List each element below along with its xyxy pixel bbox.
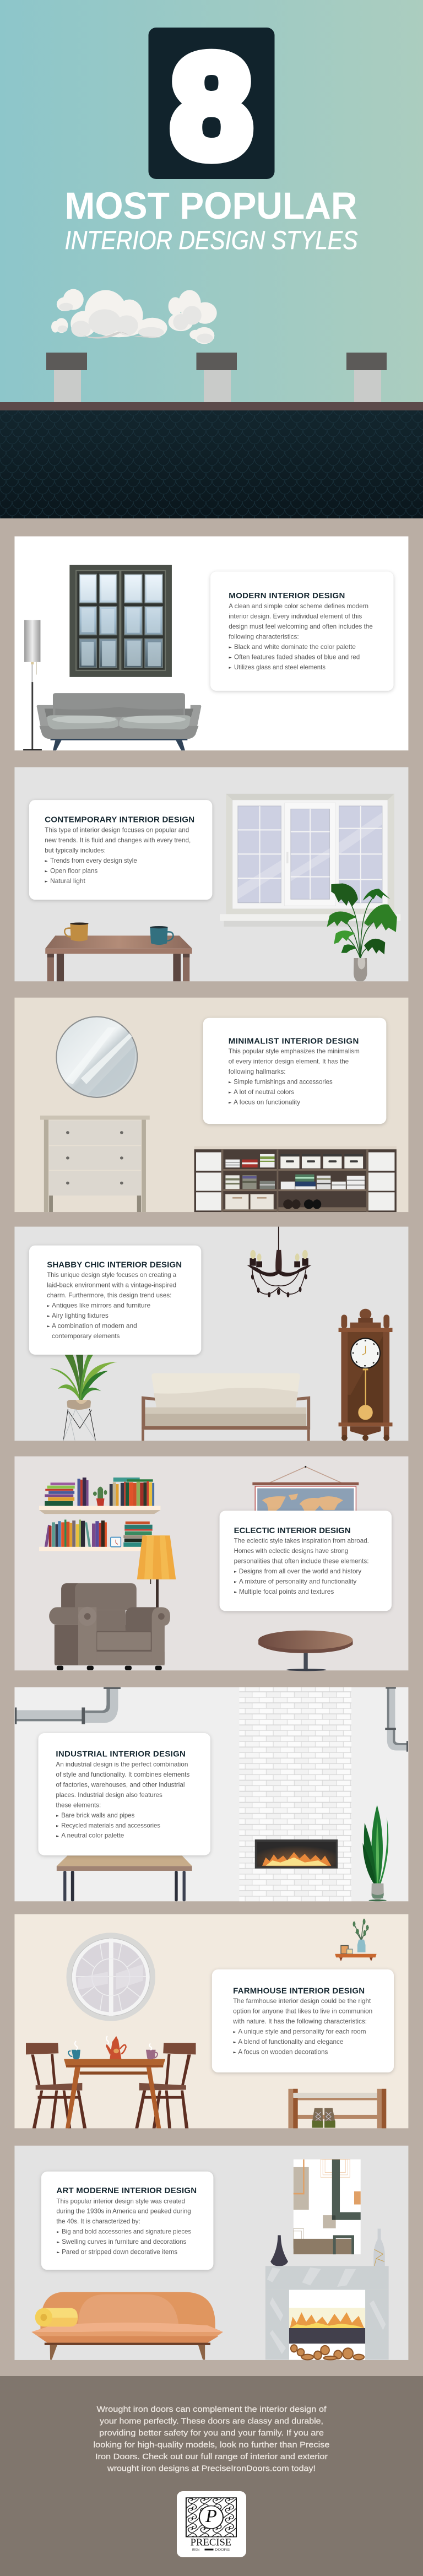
card body: ► <box>229 645 232 650</box>
card body: with nature. It has the following characteristics: <box>232 2017 367 2025</box>
card background <box>41 2172 213 2270</box>
card body: new trends. It is fluid and changes with every trend, <box>45 836 191 844</box>
illustration: plant on stand <box>50 1355 117 1441</box>
illustration: window <box>69 565 172 677</box>
card body: option for anyone that likes to live in communion <box>233 2007 372 2015</box>
illustration: world map <box>252 1466 359 1512</box>
card body: ► <box>57 2250 60 2255</box>
card background <box>212 1969 394 2072</box>
illustration: marble fireplace <box>265 2266 389 2359</box>
card body: Recycled materials and accessories <box>61 1821 160 1829</box>
panel background <box>14 767 408 981</box>
card body: Multiple focal points and textures <box>239 1588 334 1595</box>
footer text: your home perfectly. These doors are classy and durable, <box>100 2416 323 2426</box>
card body: ► <box>229 656 232 660</box>
card body: This popular style emphasizes the minimalism <box>229 1047 360 1055</box>
card body: Open floor plans <box>50 867 97 874</box>
illustration: dresser <box>40 1116 150 1212</box>
card body: Airy lighting fixtures <box>52 1312 109 1319</box>
illustration: closet shelf <box>194 1146 397 1212</box>
card body: design must feel welcoming and often includes the <box>229 623 373 630</box>
card body: ► <box>234 2040 237 2044</box>
card body: An industrial design is the perfect combination <box>56 1761 188 1768</box>
panel background <box>14 1687 408 1901</box>
illustration: chimneys <box>46 353 387 403</box>
card body: ► <box>234 2030 237 2034</box>
card body <box>229 602 373 671</box>
card body: This popular interior design style was created <box>56 2197 185 2205</box>
card body: This unique design style focuses on creating a <box>47 1271 177 1279</box>
card body: ► <box>56 1823 59 1828</box>
card body <box>56 2197 191 2255</box>
card: eclectic <box>220 1511 392 1611</box>
card body: ► <box>234 1570 237 1574</box>
illustration: bench and boots <box>288 2089 386 2128</box>
illustration: dark vase <box>270 2235 288 2266</box>
panel: eclectic <box>14 1457 408 1671</box>
card body: of factories, warehouses, and other industrial <box>56 1781 185 1789</box>
logo: Precise Iron Doors <box>177 2491 246 2557</box>
illustration: orange mug <box>64 922 89 941</box>
card background <box>203 1018 386 1124</box>
card heading: MODERN INTERIOR DESIGN <box>229 591 345 600</box>
card body: following hallmarks: <box>229 1068 286 1075</box>
subtitle: INTERIOR DESIGN STYLES <box>65 225 358 255</box>
illustration: left pipe <box>15 1687 121 1724</box>
illustration: round mirror <box>56 1017 137 1097</box>
card heading: INDUSTRIAL INTERIOR DESIGN <box>56 1749 186 1758</box>
illustration: abstract painting <box>294 2160 361 2254</box>
card heading: CONTEMPORARY INTERIOR DESIGN <box>45 815 194 824</box>
illustration: monstera plant <box>327 883 397 981</box>
illustration: chandelier <box>247 1227 312 1297</box>
card: minimalist <box>203 1018 386 1124</box>
card body: ► <box>57 2230 60 2234</box>
illustration: floor lamp <box>23 620 42 750</box>
card body: Simple furnishings and accessories <box>234 1078 333 1085</box>
number badge: 8 <box>171 25 252 187</box>
footer text: providing better safety for you and your family. If you are <box>99 2428 324 2438</box>
illustration: right pipe <box>385 1687 408 1752</box>
logo: Precise Iron Doors: IRON <box>192 2548 199 2552</box>
card body: Trends from every design style <box>50 857 137 864</box>
panel: farmhouse <box>14 1914 408 2128</box>
illustration: brick wall <box>239 1687 351 1901</box>
card body: Pared or stripped down decorative items <box>62 2248 177 2255</box>
logo: Precise Iron Doors: P <box>205 2506 217 2526</box>
card body <box>234 1537 369 1595</box>
illustration: grey sofa <box>37 693 201 750</box>
illustration: fireplace <box>255 1839 338 1869</box>
card body: charm. Furthermore, this design trend uses: <box>47 1291 171 1299</box>
panel: industrial <box>14 1687 408 1901</box>
card body: during the 1930s in America and peaked during <box>56 2207 191 2215</box>
card heading: SHABBY CHIC INTERIOR DESIGN <box>47 1260 182 1269</box>
card: industrial <box>39 1733 210 1855</box>
card body <box>232 1997 372 2055</box>
card body: ► <box>229 1080 232 1085</box>
card body <box>47 1271 177 1340</box>
card body: Utilizes glass and steel elements <box>234 663 326 671</box>
illustration: wooden table <box>57 1855 192 1901</box>
card body: laid-back environment with a vintage-inspired <box>47 1281 176 1289</box>
panel: minimalist <box>14 998 408 1212</box>
roof <box>0 402 423 518</box>
card heading: FARMHOUSE INTERIOR DESIGN <box>233 1986 365 1995</box>
card body <box>56 1761 189 1839</box>
card body: Designs from all over the world and history <box>239 1567 361 1575</box>
card body: A lot of neutral colors <box>234 1088 294 1096</box>
card heading: ART MODERNE INTERIOR DESIGN <box>56 2186 197 2195</box>
card: contemporary <box>29 800 212 900</box>
card background <box>29 1246 201 1355</box>
footer text: Wrought iron doors can complement the interior design of <box>97 2405 327 2414</box>
illustration: orange lamp <box>137 1535 176 1609</box>
illustration: armchair <box>49 1583 170 1670</box>
card body: ► <box>234 1580 237 1584</box>
chimney 2 <box>196 353 237 403</box>
card body: Swelling curves in furniture and decorations <box>62 2238 186 2245</box>
card body: ► <box>56 1814 59 1818</box>
card body: ► <box>234 1590 237 1594</box>
card body: A unique style and personality for each room <box>238 2027 366 2035</box>
illustration: round table <box>258 1631 353 1671</box>
footer <box>0 2376 423 2576</box>
card body: ► <box>47 1324 51 1329</box>
card body: ► <box>45 869 48 874</box>
sky background <box>0 0 423 403</box>
card body: interior design. Every individual element of this <box>229 613 362 620</box>
card: shabby chic <box>29 1246 201 1355</box>
card body: This type of interior design focuses on popular and <box>45 826 189 834</box>
panel: contemporary <box>14 767 408 981</box>
card: farmhouse <box>212 1969 394 2072</box>
card body: ► <box>47 1314 51 1318</box>
illustration: grandfather clock <box>339 1309 393 1441</box>
illustration: left chair <box>26 2043 86 2128</box>
card body: Big and bold accessories and signature pieces <box>62 2228 191 2236</box>
card body: following characteristics: <box>229 632 299 640</box>
card body: Often features faded shades of blue and red <box>234 653 360 661</box>
card body: ► <box>234 2050 237 2055</box>
panel background <box>14 537 408 750</box>
footer background <box>0 2376 423 2576</box>
card body: The farmhouse interior design could be the right <box>233 1997 371 2005</box>
card heading: MINIMALIST INTERIOR DESIGN <box>229 1036 359 1046</box>
panel background <box>14 1457 408 1670</box>
panel background <box>14 1914 408 2128</box>
panel background <box>14 1227 408 1441</box>
logo: Precise Iron Doors: DOORS <box>215 2548 230 2552</box>
illustration: orange sofa <box>31 2292 223 2359</box>
illustration: white vase <box>373 2228 385 2266</box>
panel background <box>14 998 408 1212</box>
card body: A mixture of personality and functionality <box>239 1577 356 1585</box>
card body: the 40s. It is characterized by: <box>56 2217 140 2225</box>
card body: ► <box>45 879 48 884</box>
header: sky and title <box>0 0 423 518</box>
card body: these elements: <box>56 1801 101 1809</box>
panel background <box>14 2146 408 2360</box>
card body: contemporary elements <box>52 1332 120 1340</box>
card body: A focus on functionality <box>234 1098 300 1106</box>
illustration: window <box>220 794 400 927</box>
illustration: smoke clouds <box>51 289 217 344</box>
footer text <box>94 2405 329 2473</box>
title: most popular: MOST POPULAR <box>65 185 357 227</box>
card body: Natural light <box>50 877 85 885</box>
card body: but typically includes: <box>45 847 106 854</box>
card background <box>210 572 393 691</box>
card body: A blend of functionality and elegance <box>238 2038 344 2045</box>
illustration: wall shelves with books <box>39 1478 160 1551</box>
illustration: cream sofa <box>142 1373 310 1441</box>
footer text: looking for high-quality models, look no further than Precise <box>94 2440 329 2449</box>
illustration: teal mug <box>150 926 173 945</box>
logo: Precise Iron Doors: PRECISE <box>191 2537 231 2548</box>
card body: The eclectic style takes inspiration from abroad. <box>234 1537 369 1545</box>
illustration: table <box>45 935 192 981</box>
card body: Homes with eclectic designs have strong <box>234 1547 348 1555</box>
card heading: ECLECTIC INTERIOR DESIGN <box>234 1526 351 1535</box>
card body: ► <box>229 1090 232 1095</box>
card body: A combination of modern and <box>52 1322 137 1329</box>
card body: ► <box>229 1101 232 1105</box>
card body: ► <box>229 665 232 670</box>
panel: modern <box>14 537 408 750</box>
card body: Bare brick walls and pipes <box>61 1811 134 1819</box>
card body: ► <box>57 2240 60 2244</box>
card background <box>220 1511 392 1611</box>
illustration: snake plant <box>363 1805 388 1901</box>
card body: A focus on wooden decorations <box>238 2048 328 2055</box>
illustration: right chair <box>135 2043 196 2128</box>
card body: ► <box>47 1304 51 1308</box>
chimney 1 <box>46 353 87 403</box>
card body: of style and functionality. It combines elements <box>56 1771 189 1778</box>
card: modern <box>210 572 393 691</box>
panel: art moderne <box>14 2146 408 2360</box>
card body: Antiques like mirrors and furniture <box>52 1301 151 1309</box>
card: art moderne <box>41 2172 213 2270</box>
card body: A clean and simple color scheme defines modern <box>229 602 368 610</box>
illustration: wall shelf with vase <box>335 1919 377 1961</box>
illustration: round window <box>66 1933 155 2021</box>
card body: Black and white dominate the color palette <box>234 643 356 651</box>
footer text: Iron Doors. Check out our full range of interior and exterior <box>95 2452 328 2461</box>
panel: shabby chic <box>14 1227 408 1441</box>
card body <box>45 826 191 885</box>
footer text: wrought iron designs at PreciseIronDoors.com today! <box>107 2464 316 2473</box>
card body <box>229 1047 360 1106</box>
chimney 3 <box>346 353 387 403</box>
card body: places. Industrial design also features <box>56 1791 162 1799</box>
card body: ► <box>56 1834 59 1838</box>
card body: ► <box>45 859 48 863</box>
card background <box>29 800 212 900</box>
illustration: kettle and mugs <box>68 2036 158 2059</box>
card background <box>39 1733 210 1855</box>
card body: personalities that often include these elements: <box>234 1557 369 1565</box>
number badge <box>149 25 274 187</box>
card body: A neutral color palette <box>61 1832 124 1839</box>
card body: of every interior design element. It has the <box>229 1058 349 1065</box>
illustration: dining table <box>64 2059 165 2128</box>
